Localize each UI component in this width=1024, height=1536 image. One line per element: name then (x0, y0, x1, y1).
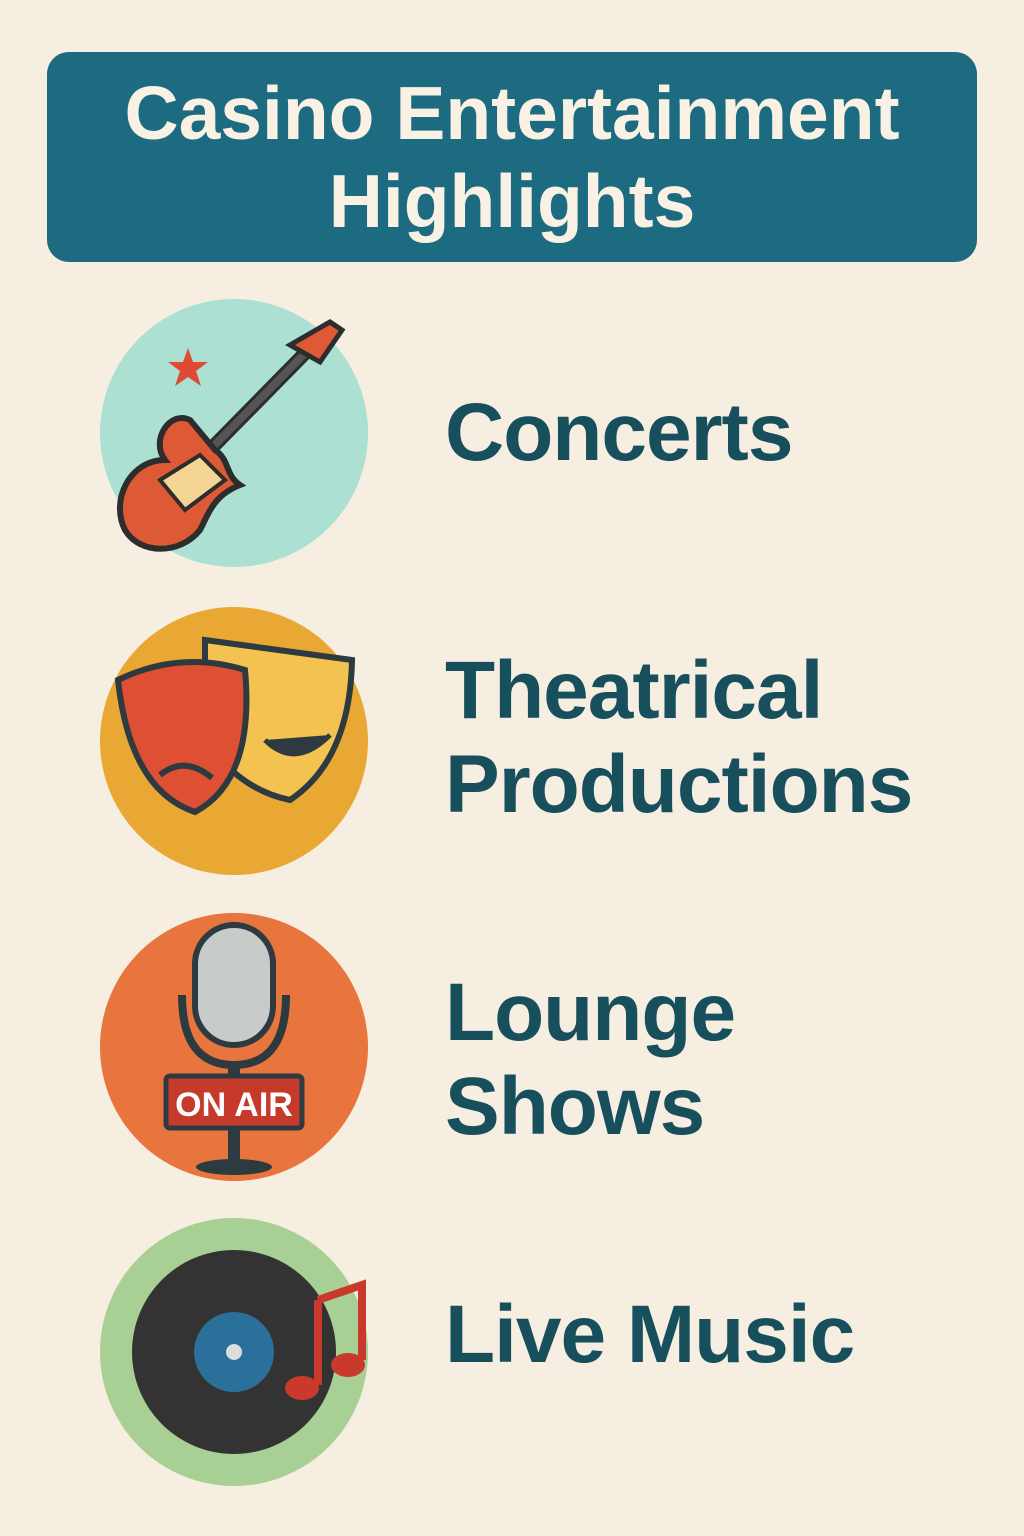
icon: vinyl record with note (100, 1218, 368, 1486)
icon: microphone on air (100, 913, 368, 1181)
icon: microphone on air: ON AIR (175, 1086, 293, 1124)
label: Lounge Shows: Lounge (445, 967, 735, 1058)
label: Lounge Shows: Shows (445, 1061, 704, 1152)
title banner: Casino Entertainment (124, 71, 900, 155)
title banner (47, 52, 977, 262)
label: Theatrical Productions: Productions (445, 739, 912, 830)
label: Theatrical Productions: Theatrical (445, 645, 822, 736)
icon: theatre masks (100, 607, 368, 875)
label: Concerts: Concerts (445, 387, 792, 478)
label: Lounge Shows (445, 967, 735, 1152)
label: Live Music: Live Music (445, 1289, 854, 1380)
title banner: Highlights (329, 159, 695, 243)
icon: guitar (100, 299, 368, 567)
label: Theatrical Productions (445, 645, 912, 830)
